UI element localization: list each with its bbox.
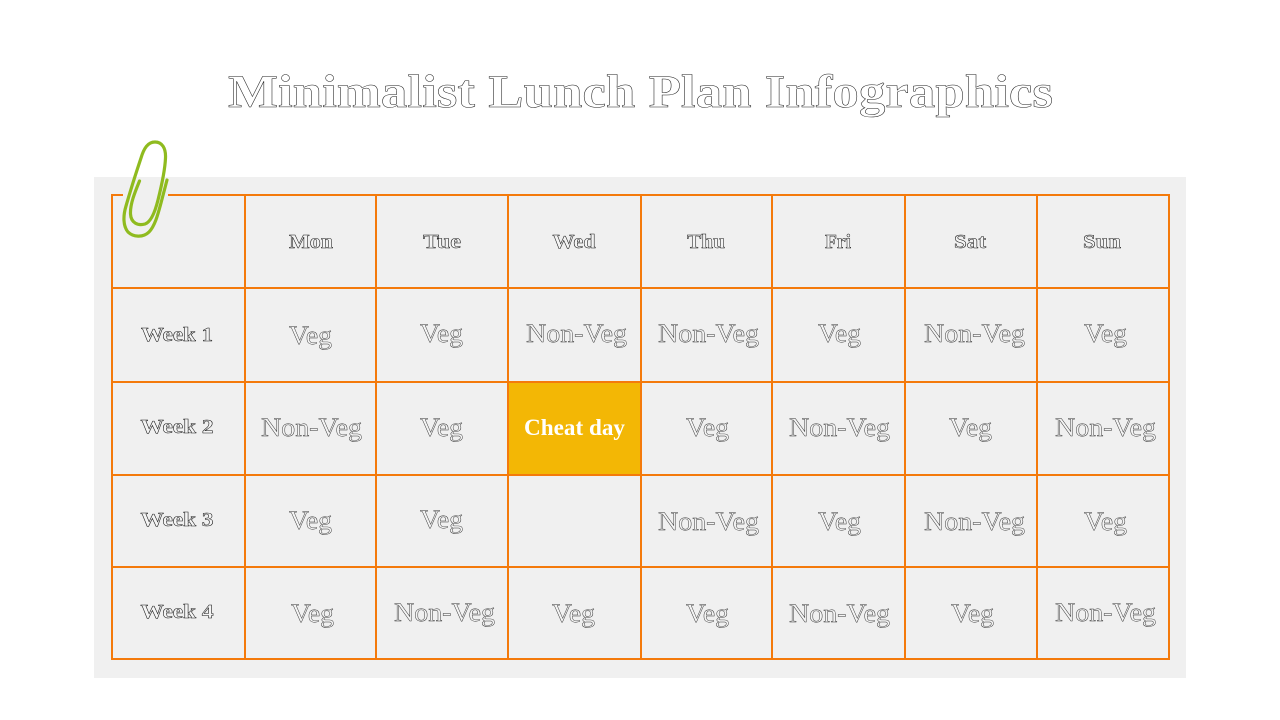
column headers: Mon [289,231,333,253]
week 4 meals [291,598,1156,628]
row headers: Week 4 [140,601,214,623]
column headers: Tue [423,231,461,253]
week 1 meals: Veg [420,319,463,348]
highlighted cell: cheat day: Cheat day [524,415,626,440]
week 4 meals: Veg [686,599,729,628]
row headers: Week 1 [141,324,213,346]
icon: paperclip [124,142,167,236]
week 1 meals: Veg [818,319,861,348]
column headers: Sun [1083,231,1121,253]
table grid [112,195,1169,659]
column headers: Thu [687,231,725,253]
week 1 meals: Non-Veg [924,319,1025,348]
week 4 meals: Non-Veg [1055,598,1156,627]
week 4 meals: Non-Veg [789,599,890,628]
week 2 meals: Non-Veg [261,413,362,442]
week 3 meals: Non-Veg [658,507,759,536]
week 3 meals: Non-Veg [924,507,1025,536]
week 3 meals [289,505,1127,536]
row headers [140,324,214,623]
week 4 meals: Veg [291,599,334,628]
week 4 meals: Non-Veg [394,598,495,627]
week 2 meals: Non-Veg [789,413,890,442]
week 3 meals: Veg [1084,507,1127,536]
week 2 meals: Veg [949,413,992,442]
column headers [289,231,1121,253]
week 3 meals: Veg [289,506,332,535]
week 1 meals: Veg [1084,319,1127,348]
week 2 meals [261,413,1156,442]
week 3 meals: Veg [420,505,463,534]
title: Minimalist Lunch Plan Infographics [228,66,1053,118]
row headers: Week 3 [140,509,214,531]
week 4 meals: Veg [552,599,595,628]
week 1 meals [289,319,1127,350]
column headers: Fri [825,231,851,253]
week 1 meals: Non-Veg [658,319,759,348]
column headers: Sat [954,231,986,253]
week 2 meals: Veg [420,413,463,442]
week 2 meals: Veg [686,413,729,442]
row headers: Week 2 [140,416,214,438]
week 2 meals: Non-Veg [1055,413,1156,442]
week 1 meals: Non-Veg [526,319,627,348]
panel: background [94,177,1186,678]
week 4 meals: Veg [951,599,994,628]
week 1 meals: Veg [289,321,332,350]
column headers: Wed [552,231,596,253]
highlighted cell: cheat day [508,382,641,475]
week 3 meals: Veg [818,507,861,536]
